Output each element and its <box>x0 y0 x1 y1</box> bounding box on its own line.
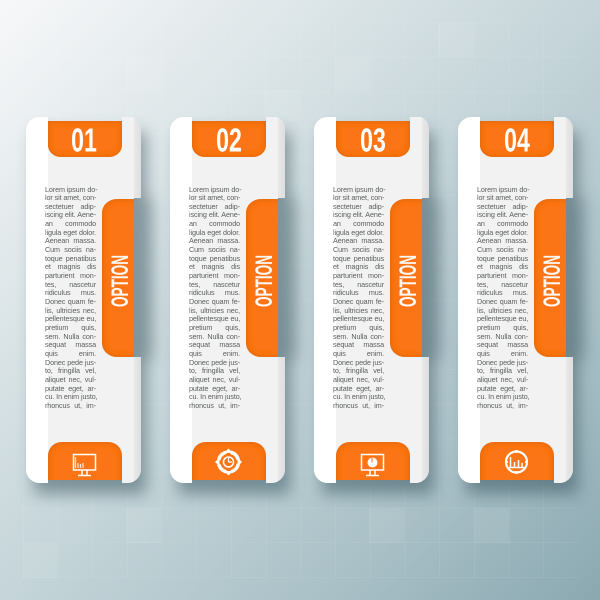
body text: rhoncus ut, im- <box>45 401 96 410</box>
side tab <box>246 199 278 357</box>
icon: circular bar chart <box>505 450 528 474</box>
body text: toque penatibus <box>477 254 528 263</box>
body text: sectetuer adip- <box>477 202 528 211</box>
body text: Donec pede jus- <box>477 358 528 367</box>
body text: tes, nascetur <box>333 280 384 289</box>
card shadow <box>34 132 152 494</box>
body text <box>45 184 98 410</box>
body text: toque penatibus <box>333 254 384 263</box>
card body <box>458 117 573 483</box>
body text: rhoncus ut, im- <box>189 401 240 410</box>
left edge highlight <box>170 117 192 483</box>
body text: pretium quis, <box>333 323 384 332</box>
card shadow <box>466 132 584 494</box>
bottom flap <box>554 357 573 483</box>
body text: Donec quam fe- <box>333 297 384 306</box>
card body <box>314 117 429 483</box>
body text: parturient mon- <box>477 271 528 280</box>
body text: sectetuer adip- <box>189 202 240 211</box>
body text: quis enim. <box>189 349 240 358</box>
body text: sem. Nulla con- <box>477 332 528 341</box>
icon tab <box>48 442 122 480</box>
option label: OPTION <box>539 255 566 307</box>
body text: an commodo <box>45 219 96 228</box>
body text: lor sit amet, con- <box>45 193 96 202</box>
body text: et magnis dis <box>189 262 240 271</box>
body text <box>333 184 386 410</box>
body text: quis enim. <box>45 349 96 358</box>
body text: quis enim. <box>333 349 384 358</box>
body text: Donec pede jus- <box>189 358 240 367</box>
body text: Aenean massa. <box>333 236 384 245</box>
body text: Donec quam fe- <box>45 297 96 306</box>
option label: OPTION <box>251 255 278 307</box>
left edge highlight <box>26 117 48 483</box>
body text: putate eget, ar- <box>189 384 240 393</box>
top flap <box>554 117 573 198</box>
body text: pellentesque eu, <box>333 314 384 323</box>
body text: sem. Nulla con- <box>45 332 96 341</box>
card shadow <box>178 132 296 494</box>
card body <box>170 117 285 483</box>
body text: Donec pede jus- <box>333 358 384 367</box>
icon: cycle arrows <box>215 448 242 476</box>
body text: sequat massa <box>45 340 96 349</box>
body text: iscing elit. Aene- <box>45 210 96 219</box>
number tab <box>192 121 266 157</box>
body text: Lorem ipsum do- <box>45 184 97 194</box>
body text: iscing elit. Aene- <box>333 210 384 219</box>
body text: Lorem ipsum do- <box>189 184 241 194</box>
body text: et magnis dis <box>45 262 96 271</box>
body text: aliquet nec, vul- <box>189 375 240 384</box>
body text: ridiculus mus. <box>189 288 240 297</box>
body text: et magnis dis <box>333 262 384 271</box>
bottom flap <box>266 357 285 483</box>
card shadow <box>322 132 440 494</box>
body text: Cum sociis na- <box>333 245 384 254</box>
body text: sequat massa <box>477 340 528 349</box>
icon tab <box>480 442 554 480</box>
body text: sequat massa <box>189 340 240 349</box>
body text: aliquet nec, vul- <box>333 375 384 384</box>
body text: ridiculus mus. <box>477 288 528 297</box>
body text: ligula eget dolor. <box>189 228 240 237</box>
body text: aliquet nec, vul- <box>45 375 96 384</box>
body text: toque penatibus <box>45 254 96 263</box>
body text: lis, ultricies nec, <box>189 306 240 315</box>
body text: sequat massa <box>333 340 384 349</box>
body text: tes, nascetur <box>45 280 96 289</box>
body text: sem. Nulla con- <box>189 332 240 341</box>
left edge highlight <box>458 117 480 483</box>
body text: rhoncus ut, im- <box>477 401 528 410</box>
card body <box>26 117 141 483</box>
body text: putate eget, ar- <box>477 384 528 393</box>
icon tab <box>192 442 266 480</box>
body text: pellentesque eu, <box>189 314 240 323</box>
body text: to, fringilla vel, <box>189 366 240 375</box>
body text: lor sit amet, con- <box>333 193 384 202</box>
body text: Lorem ipsum do- <box>333 184 385 194</box>
option label: OPTION <box>107 255 134 307</box>
side tab <box>534 199 566 357</box>
body text: parturient mon- <box>45 271 96 280</box>
option label: OPTION <box>395 255 422 307</box>
number: 01 <box>71 123 97 160</box>
body text: ligula eget dolor. <box>477 228 528 237</box>
body text: ligula eget dolor. <box>45 228 96 237</box>
body text: Donec quam fe- <box>189 297 240 306</box>
body text: putate eget, ar- <box>333 384 384 393</box>
number: 02 <box>216 123 242 160</box>
body text: Aenean massa. <box>477 236 528 245</box>
body text: iscing elit. Aene- <box>477 210 528 219</box>
body text: putate eget, ar- <box>45 384 96 393</box>
body text: ridiculus mus. <box>333 288 384 297</box>
body text: sem. Nulla con- <box>333 332 384 341</box>
body text: Aenean massa. <box>189 236 240 245</box>
number: 04 <box>504 123 530 160</box>
side tab <box>102 199 134 357</box>
body text: lor sit amet, con- <box>477 193 528 202</box>
body text: tes, nascetur <box>189 280 240 289</box>
top flap <box>122 117 141 198</box>
body text: sectetuer adip- <box>45 202 96 211</box>
number tab <box>48 121 122 157</box>
icon tab <box>336 442 410 480</box>
body text: to, fringilla vel, <box>477 366 528 375</box>
body text: lis, ultricies nec, <box>45 306 96 315</box>
body text: Cum sociis na- <box>189 245 240 254</box>
body text: ligula eget dolor. <box>333 228 384 237</box>
body text: Donec quam fe- <box>477 297 528 306</box>
body text: Cum sociis na- <box>45 245 96 254</box>
body text: pretium quis, <box>189 323 240 332</box>
body text: tes, nascetur <box>477 280 528 289</box>
top flap <box>266 117 285 198</box>
body text: parturient mon- <box>333 271 384 280</box>
body text: aliquet nec, vul- <box>477 375 528 384</box>
number tab <box>480 121 554 157</box>
body text: ridiculus mus. <box>45 288 96 297</box>
icon: monitor with pie chart <box>362 454 384 476</box>
body text: Cum sociis na- <box>477 245 528 254</box>
body text: pellentesque eu, <box>477 314 528 323</box>
body text: parturient mon- <box>189 271 240 280</box>
body text: sectetuer adip- <box>333 202 384 211</box>
number: 03 <box>360 123 386 160</box>
body text: cu. In enim justo, <box>333 392 386 401</box>
body text: cu. In enim justo, <box>477 392 530 401</box>
body text: Donec pede jus- <box>45 358 96 367</box>
body text: lis, ultricies nec, <box>333 306 384 315</box>
body text: cu. In enim justo, <box>189 392 242 401</box>
left edge highlight <box>314 117 336 483</box>
body text: an commodo <box>333 219 384 228</box>
body text: an commodo <box>477 219 528 228</box>
body text: pretium quis, <box>45 323 96 332</box>
body text <box>189 184 242 410</box>
body text <box>477 184 530 410</box>
number tab <box>336 121 410 157</box>
panel: option 04 <box>456 117 593 502</box>
body text: toque penatibus <box>189 254 240 263</box>
body text: lor sit amet, con- <box>189 193 240 202</box>
body text: cu. In enim justo, <box>45 392 98 401</box>
body text: pellentesque eu, <box>45 314 96 323</box>
body text: pretium quis, <box>477 323 528 332</box>
body text: an commodo <box>189 219 240 228</box>
body text: iscing elit. Aene- <box>189 210 240 219</box>
icon: monitor <box>74 454 96 476</box>
body text: quis enim. <box>477 349 528 358</box>
body text: to, fringilla vel, <box>45 366 96 375</box>
body text: Lorem ipsum do- <box>477 184 529 194</box>
panel: option 01 <box>24 117 162 504</box>
bottom flap <box>410 357 429 483</box>
body text: to, fringilla vel, <box>333 366 384 375</box>
panel: option 02 <box>168 117 306 504</box>
side tab <box>390 199 422 357</box>
body text: et magnis dis <box>477 262 528 271</box>
body text: Aenean massa. <box>45 236 96 245</box>
body text: lis, ultricies nec, <box>477 306 528 315</box>
panel: option 03 <box>312 117 450 503</box>
bottom flap <box>122 357 141 483</box>
top flap <box>410 117 429 198</box>
body text: rhoncus ut, im- <box>333 401 384 410</box>
